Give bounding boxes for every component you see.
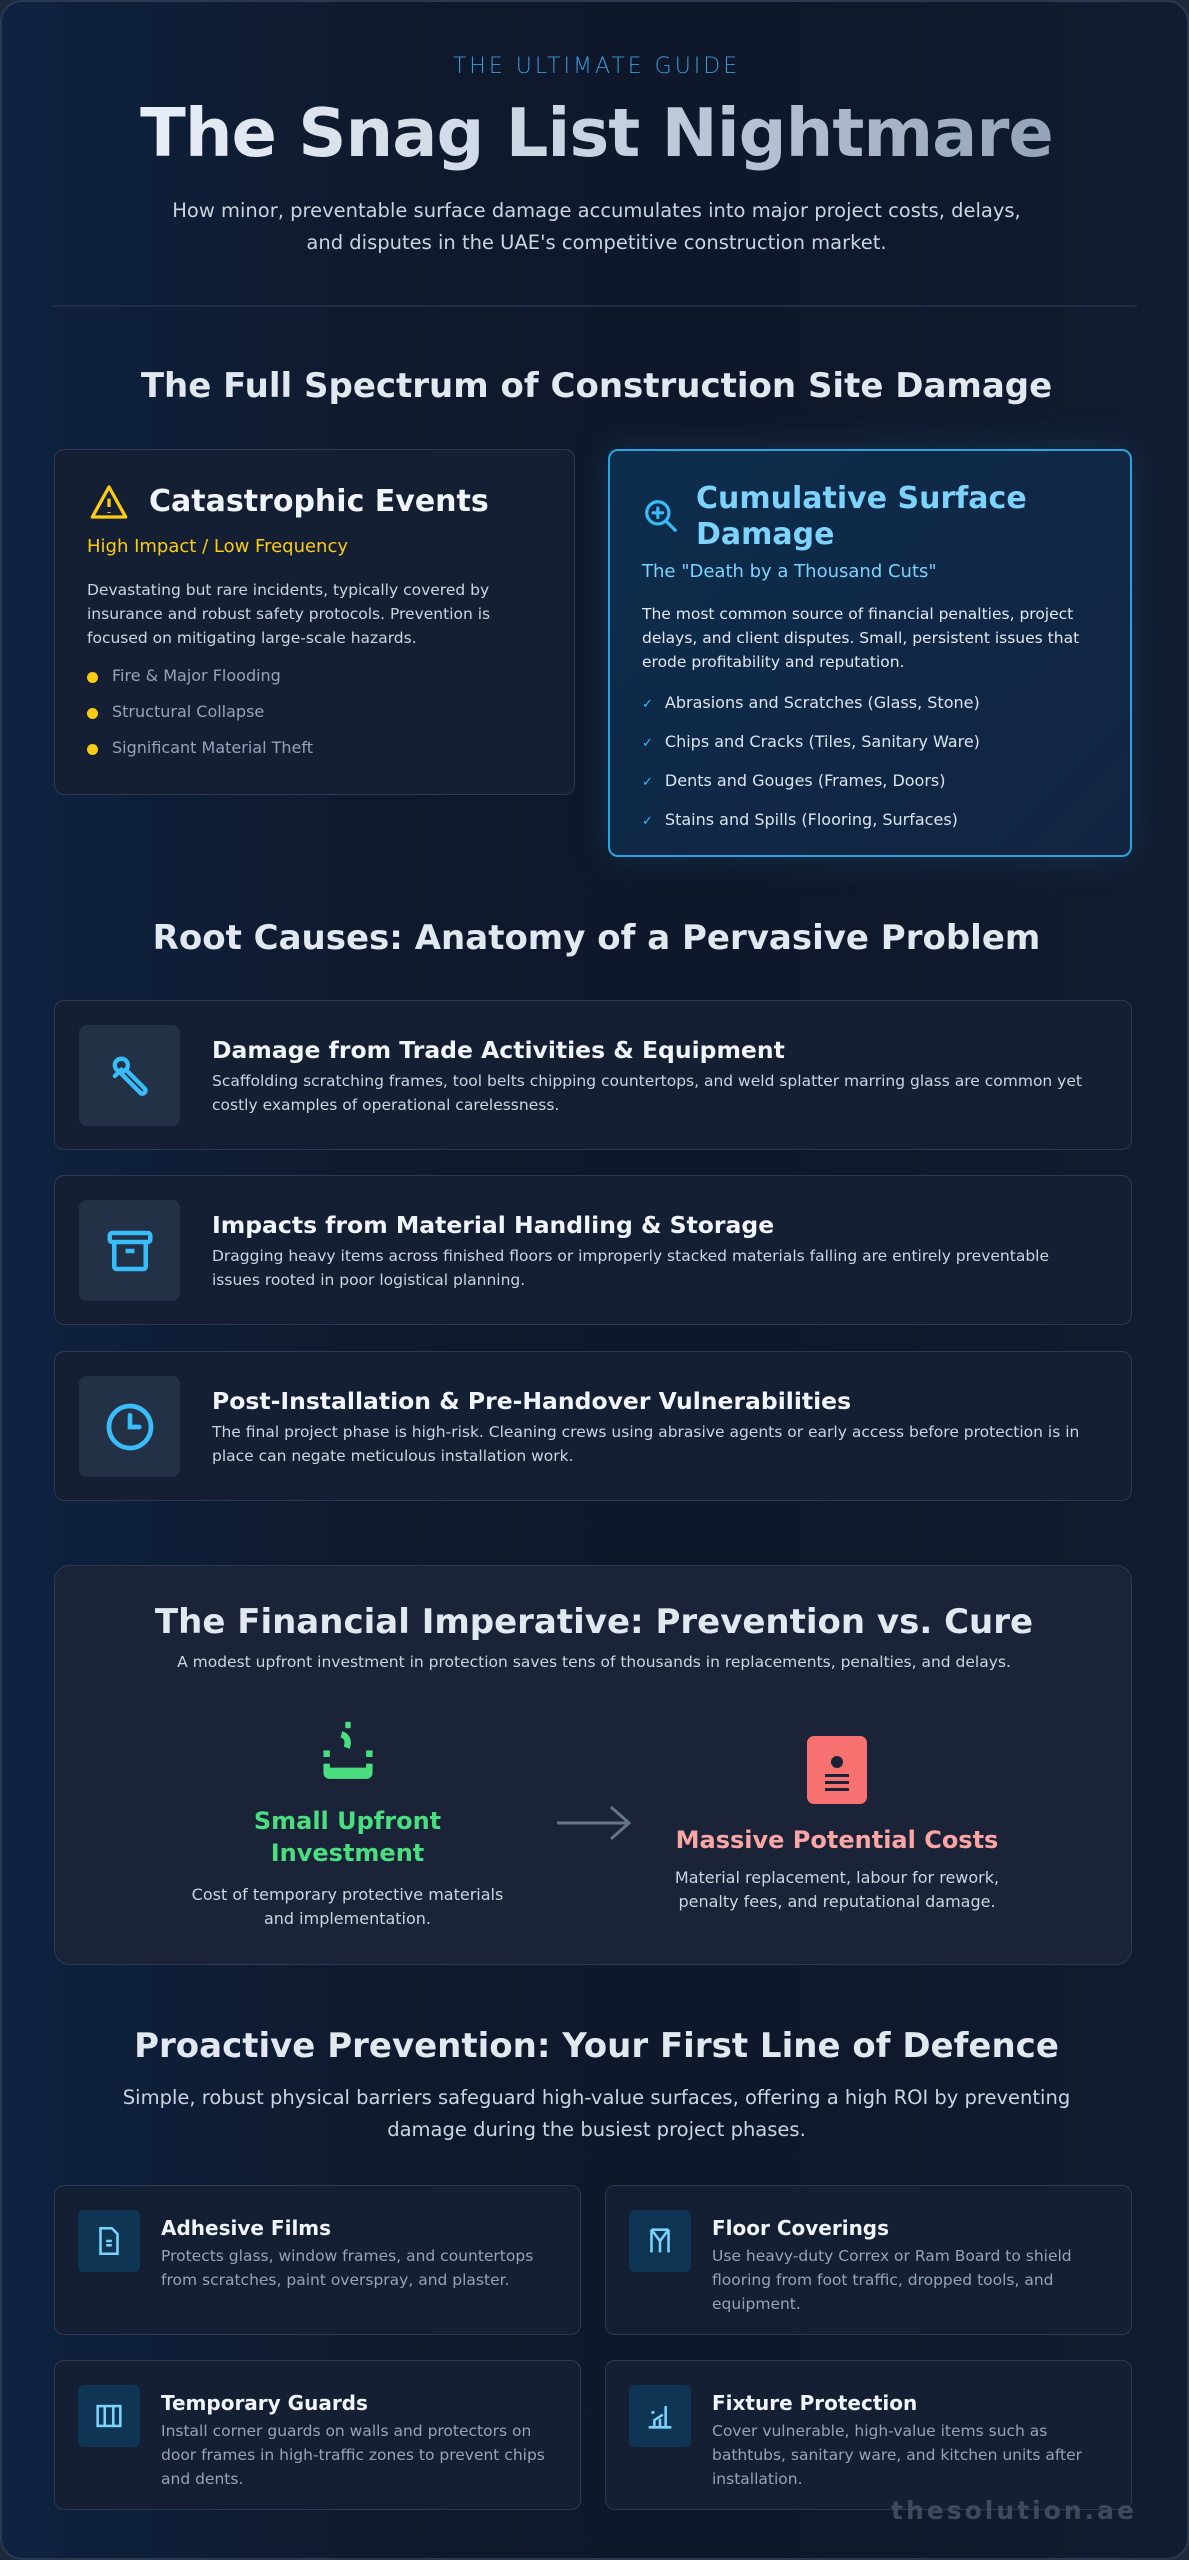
subtitle: prevention [123,2086,1070,2141]
panel: material handling [54,1175,1132,1325]
tagline: The "Death by a Thousand Cuts" [642,561,937,582]
heading: root causes: Root Causes: Anatomy of a Pervasive Problem [153,918,1040,958]
title: The Snag List Nightmare [140,94,1053,172]
description: The most common source of financial penalties, project delays, and client disputes. Small, persistent issues that erode profitability and reputation. [642,605,1079,671]
icon: red document [807,1736,867,1804]
column: massive potential costs: Material replacement, labour for rework, penalty fees, and reputational damage. [675,1868,999,1911]
panel: post-installation: The final project phase is high-risk. Cleaning crews using abrasive agents or early access before protection is in place can negate meticulous installation work. [212,1423,1079,1465]
panel: trade activities: Damage from Trade Activities & Equipment [212,1036,785,1064]
icon: warning [90,485,128,519]
column: massive potential costs [675,1736,999,1911]
heading: full spectrum: The Full Spectrum of Construction Site Damage [141,366,1052,406]
icon: film [78,2210,140,2272]
card: temporary guards: Install corner guards on walls and protectors on door frames in high-traffic zones to prevent chips and dents. [161,2422,545,2488]
panel: financial imperative [54,1565,1132,1965]
card: adhesive films [54,2185,581,2335]
card: adhesive films: Protects glass, window frames, and countertops from scratches, paint overspray, and plaster. [161,2247,533,2289]
column: small upfront investment: Small Upfront [254,1807,441,1835]
panel: trade activities: Scaffolding scratching frames, tool belts chipping countertops, and weld splatter marring glass are common yet costly examples of operational carelessness. [212,1072,1082,1114]
panel: cumulative surface damage [608,449,1132,857]
panel: catastrophic events [54,449,575,795]
subtitle: prevention: Simple, robust physical barriers safeguard high-value surfaces, offering a high ROI by preventing [123,2086,1070,2109]
heading: Cumulative Surface [696,481,1027,516]
panel: post-installation [54,1351,1132,1501]
icon: green tray [323,1722,373,1779]
card: floor coverings: Use heavy-duty Correx or Ram Board to shield flooring from foot traffic, dropped tools, and equipment. [712,2247,1072,2313]
subtitle: and disputes in the UAE's competitive construction market. [306,231,887,254]
heading: Catastrophic Events [149,484,489,519]
icon: fixture [629,2385,691,2447]
column: small upfront investment [192,1722,503,1928]
heading: The Financial Imperative: Prevention vs. Cure [155,1602,1033,1642]
arrow [557,1806,632,1840]
column: small upfront investment: Cost of temporary protective materials and implementation. [192,1885,503,1928]
panel: post-installation: Post-Installation & Pre-Handover Vulnerabilities [212,1387,851,1415]
bullet list: Structural Collapse [112,702,264,721]
eyebrow: THE ULTIMATE GUIDE [453,54,740,79]
card: floor coverings [605,2185,1132,2335]
checklist: ✓ Chips and Cracks (Tiles, Sanitary Ware) [642,732,980,751]
checklist: ✓ Dents and Gouges (Frames, Doors) [642,771,946,790]
heading: Damage [696,517,834,552]
panel: material handling: Impacts from Material Handling & Storage [212,1211,774,1239]
watermark: thesolution.ae [891,2496,1137,2525]
tagline: High Impact / Low Frequency [87,536,348,557]
card: temporary guards [54,2360,581,2510]
heading: proactive prevention: Proactive Prevention: Your First Line of Defence [134,2026,1059,2066]
checklist: ✓ Abrasions and Scratches (Glass, Stone) [642,693,980,712]
subtitle: prevention: damage during the busiest project phases. [387,2118,806,2141]
checklist [642,693,980,829]
bullet list: Significant Material Theft [112,738,313,757]
subtitle: A modest upfront investment in protection saves tens of thousands in replacements, penalties, and delays. [177,1653,1011,1671]
card: adhesive films: Adhesive Films [161,2216,331,2240]
icon: archive box [79,1200,180,1301]
panel: material handling: Dragging heavy items across finished floors or improperly stacked materials falling are entirely preventable issues rooted in poor logistical planning. [212,1247,1049,1289]
card: temporary guards: Temporary Guards [161,2391,368,2415]
card: fixture protection [605,2360,1132,2510]
card: floor coverings: Floor Coverings [712,2216,889,2240]
icon: clock [79,1376,180,1477]
panel: trade activities [54,1000,1132,1150]
subtitle: How minor, preventable surface damage accumulates into major project costs, delays, [172,199,1021,222]
checklist: ✓ Stains and Spills (Flooring, Surfaces) [642,810,958,829]
column: small upfront investment: Investment [271,1839,424,1867]
description: Devastating but rare incidents, typically covered by insurance and robust safety protocols. Prevention is focused on mitigating large-scale hazards. [87,581,490,647]
heading [696,481,1027,552]
bullet list: Fire & Major Flooding [112,666,281,685]
column: massive potential costs: Massive Potential Costs [676,1826,998,1854]
icon: tools [79,1025,180,1126]
bullet list [87,666,313,757]
card: fixture protection: Fixture Protection [712,2391,917,2415]
icon: floor [629,2210,691,2272]
subtitle [172,199,1021,254]
icon: magnifier [645,500,677,532]
icon: guard [78,2385,140,2447]
card: fixture protection: Cover vulnerable, high-value items such as bathtubs, sanitary ware, and kitchen units after installation. [712,2422,1082,2488]
